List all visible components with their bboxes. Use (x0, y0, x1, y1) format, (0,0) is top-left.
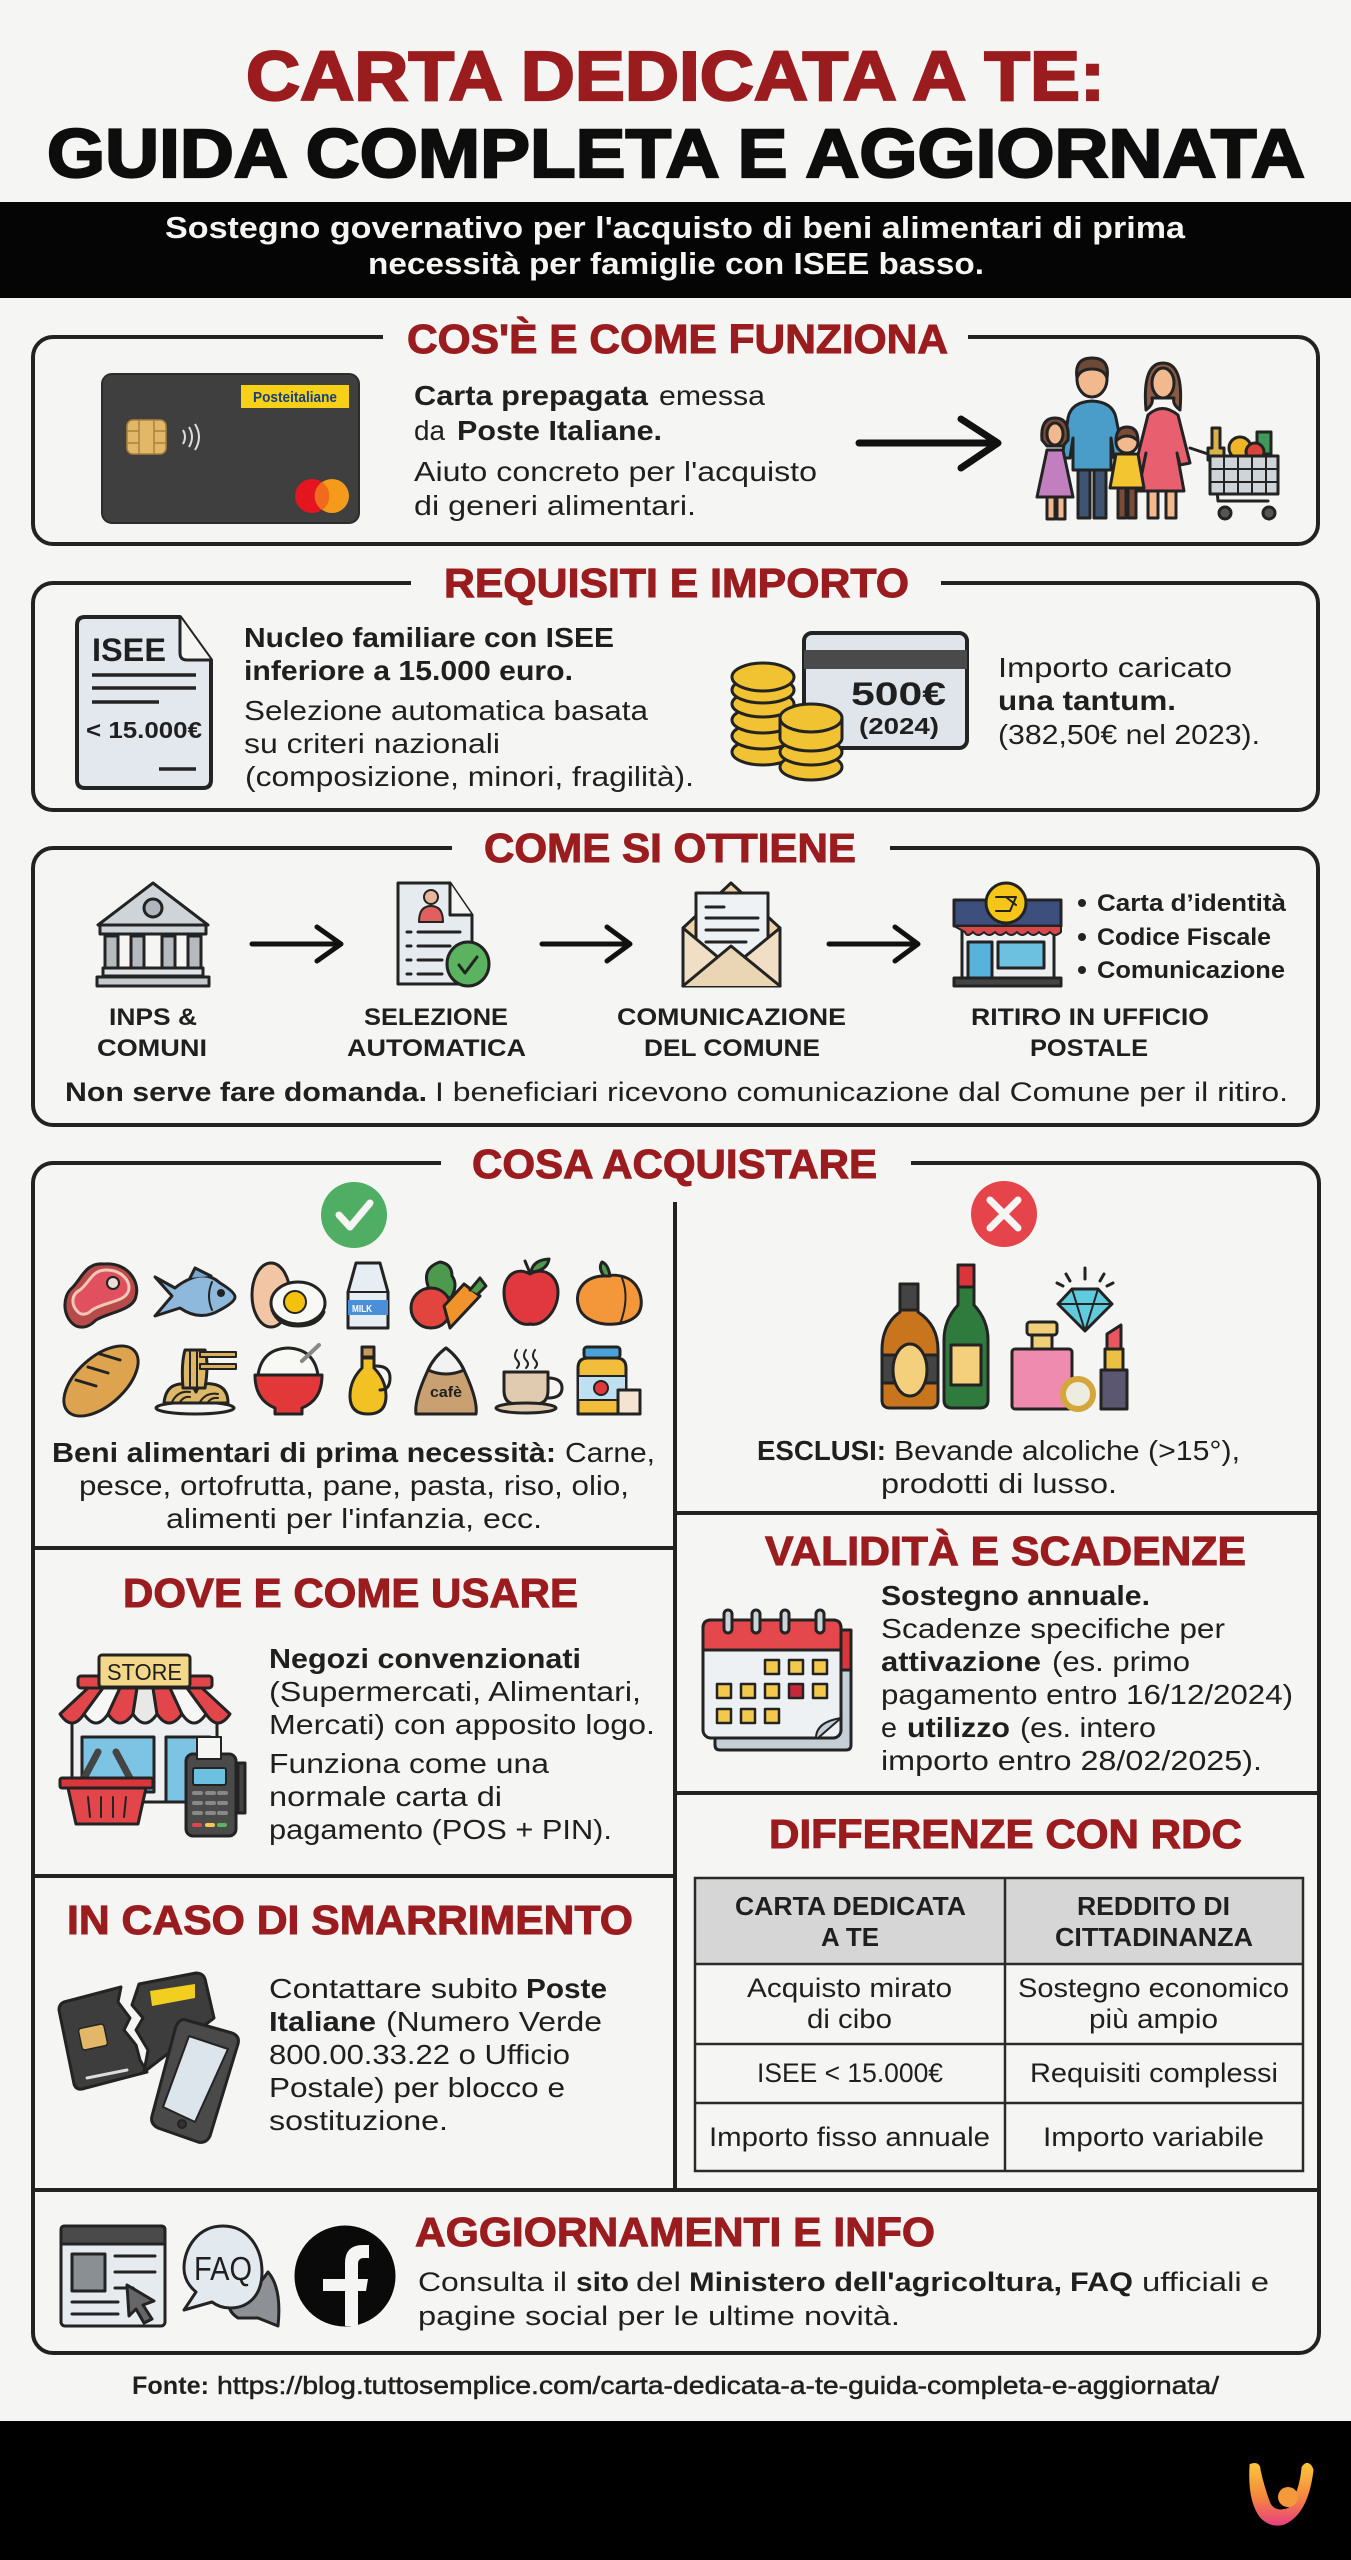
panel: aggiornamenti e info (61, 2209, 1269, 2331)
subtitle band: necessità per famiglie con ISEE basso. (368, 246, 984, 281)
heading: cos'è e come funziona: COS'È E COME FUNZIONA (407, 316, 948, 362)
text: beni alimentari: Beni alimentari di prima necessità: (52, 1437, 556, 1468)
text: beni alimentari: pesce, ortofrutta, pane, pasta, riso, olio, (79, 1470, 629, 1501)
comparison table: ISEE < 15.000€ (757, 2058, 943, 2088)
text: importo una tantum: (382,50€ nel 2023). (998, 719, 1260, 750)
text: sostegno annuale: (es. intero (1020, 1712, 1156, 1743)
panel: come si ottiene (33, 825, 1318, 1125)
text: nucleo familiare: (composizione, minori, fragilità). (245, 761, 694, 792)
text: nucleo familiare: su criteri nazionali (244, 728, 500, 759)
text: consulta: pagine social per le ultime novità. (418, 2301, 900, 2331)
subtitle band: Sostegno governativo per l'acquisto di beni alimentari di prima (165, 210, 1186, 245)
text: contattare poste: (Numero Verde (386, 2006, 602, 2037)
arrow (859, 419, 998, 468)
step labels: SELEZIONE (364, 1004, 508, 1031)
text: consulta: sito (576, 2267, 629, 2297)
icon: green check (321, 1182, 387, 1248)
icon: FAQ bubbles (184, 2226, 279, 2326)
text: carta prepagata: da (414, 415, 445, 446)
text: consulta: ufficiali e (1142, 2267, 1269, 2297)
step labels: INPS & (109, 1004, 197, 1031)
note: no application needed: Non serve fare domanda. (65, 1077, 427, 1107)
text: negozi convenzionati (269, 1643, 655, 1845)
title: GUIDA COMPLETA E AGGIORNATA (47, 115, 1305, 192)
note: no application needed: I beneficiari ricevono comunicazione dal Comune per il ritiro. (435, 1077, 1288, 1107)
panel: differenze con rdc (695, 1811, 1303, 2171)
source line: Fonte: (132, 2372, 209, 2400)
icon: store, basket and POS: STORE (107, 1659, 182, 1685)
arrow (252, 927, 341, 961)
panel: grid frame cosa acquistare (33, 1150, 1319, 2353)
panel: requisiti e importo (33, 560, 1318, 810)
comparison table: CARTA DEDICATA (735, 1891, 966, 1921)
panel: dove e come usare (60, 1570, 655, 1845)
text: esclusi: prodotti di lusso. (881, 1468, 1117, 1499)
text: importo una tantum: Importo caricato (998, 652, 1232, 683)
icon: facebook (294, 2226, 396, 2326)
icon: store, basket and POS (60, 1655, 245, 1836)
icon: automatic selection document (398, 883, 489, 986)
title (47, 37, 1305, 192)
heading: come si ottiene: COME SI OTTIENE (484, 825, 856, 871)
text: negozi convenzionati: normale carta di (269, 1781, 502, 1812)
icon: coins and card 500 euro: (2024) (859, 713, 939, 739)
text: sostegno annuale: (es. primo (1052, 1646, 1190, 1677)
text: esclusi (757, 1435, 1240, 1499)
step labels: POSTALE (1030, 1035, 1148, 1062)
icon: INPS building (97, 883, 209, 986)
heading: dove e come usare: DOVE E COME USARE (123, 1570, 578, 1616)
comparison table: REDDITO DI (1077, 1891, 1230, 1921)
comparison table: Importo fisso annuale (709, 2122, 990, 2152)
text: sostegno annuale: attivazione (881, 1646, 1041, 1677)
icon: calendar (703, 1610, 851, 1750)
text: beni alimentari: Carne, (565, 1437, 655, 1468)
icon: ISEE document: < 15.000€ (86, 717, 202, 743)
text: consulta: FAQ (1070, 2267, 1133, 2297)
text: sostegno annuale: Sostegno annuale. (881, 1580, 1150, 1611)
text: sostegno annuale: importo entro 28/02/2025). (881, 1745, 1262, 1776)
heading: in caso di smarrimento: IN CASO DI SMARRIMENTO (67, 1897, 633, 1943)
text: carta prepagata: Aiuto concreto per l'acquisto (414, 456, 817, 487)
text: carta prepagata: di generi alimentari. (414, 490, 696, 521)
icon: ISEE document (77, 617, 211, 788)
step labels: RITIRO IN UFFICIO (971, 1004, 1209, 1031)
list: documents required: Codice Fiscale (1097, 924, 1271, 951)
text: nucleo familiare: Selezione automatica basata (244, 695, 648, 726)
text: negozi convenzionati: Funziona come una (269, 1748, 549, 1779)
text: sostegno annuale: pagamento entro 16/12/2024) (881, 1679, 1293, 1710)
comparison table: A TE (821, 1922, 879, 1952)
panel: cos'è e come funziona (33, 316, 1318, 544)
step labels: DEL COMUNE (644, 1035, 820, 1062)
icon: family with shopping cart (1037, 358, 1278, 519)
text: sostegno annuale: utilizzo (907, 1712, 1010, 1743)
step labels: COMUNI (97, 1035, 207, 1062)
text: sostegno annuale: e (881, 1712, 897, 1743)
heading: cosa acquistare: COSA ACQUISTARE (472, 1141, 877, 1187)
text: nucleo familiare (244, 622, 694, 792)
list: documents required (1078, 890, 1287, 984)
text: consulta: del (636, 2267, 681, 2297)
arrow (829, 927, 918, 961)
icon: prepaid card: Posteitaliane (253, 389, 337, 406)
text: consulta: Ministero dell'agricoltura, (689, 2267, 1062, 2297)
comparison table: di cibo (807, 2004, 892, 2034)
icon: red cross (971, 1181, 1037, 1247)
text: contattare poste: Contattare subito (269, 1973, 518, 2004)
comparison table: CITTADINANZA (1055, 1922, 1253, 1952)
text: contattare poste: 800.00.33.22 o Ufficio (269, 2039, 570, 2070)
text: sostegno annuale: Scadenze specifiche per (881, 1613, 1225, 1644)
source line: https://blog.tuttosemplice.com/carta-dedicata-a-te-guida-completa-e-aggiornata/ (217, 2372, 1219, 2400)
heading: requisiti e importo: REQUISITI E IMPORTO (444, 560, 909, 606)
logo (1252, 2465, 1311, 2523)
text: contattare poste: Postale) per blocco e (269, 2072, 565, 2103)
step labels: COMUNICAZIONE (617, 1004, 846, 1031)
comparison table: Acquisto mirato (747, 1973, 952, 2003)
panel: in caso di smarrimento (59, 1897, 633, 2142)
step labels: AUTOMATICA (347, 1035, 526, 1062)
text: carta prepagata: emessa (659, 380, 765, 411)
food icons: MILK (352, 1304, 373, 1315)
text: contattare poste: sostituzione. (269, 2105, 448, 2136)
list: documents required: Carta d’identità (1097, 890, 1287, 917)
text: consulta (418, 2267, 1269, 2331)
heading: validità e scadenze: VALIDITÀ E SCADENZE (765, 1528, 1246, 1574)
text: carta prepagata: Poste Italiane. (457, 415, 662, 446)
text: carta prepagata: Carta prepagata (414, 380, 648, 411)
title: CARTA DEDICATA A TE: (246, 37, 1105, 115)
text: negozi convenzionati: Negozi convenzionati (269, 1643, 581, 1674)
text: negozi convenzionati: pagamento (POS + PIN). (269, 1814, 612, 1845)
text: carta prepagata (414, 380, 817, 521)
icon: ISEE document: ISEE (92, 632, 166, 668)
heading: differenze con rdc: DIFFERENZE CON RDC (769, 1811, 1242, 1857)
step labels (97, 1004, 1209, 1062)
icon: envelope (683, 883, 780, 986)
text: contattare poste: Poste (526, 1973, 607, 2004)
text: esclusi: Bevande alcoliche (>15°), (894, 1435, 1240, 1466)
footer black band (0, 2421, 1351, 2560)
text: contattare poste (269, 1973, 607, 2136)
list: documents required: Comunicazione (1097, 957, 1285, 984)
text: sostegno annuale (881, 1580, 1293, 1776)
icon: prepaid card (102, 374, 359, 523)
subtitle band (0, 202, 1351, 298)
heading: aggiornamenti e info: AGGIORNAMENTI E INFO (415, 2209, 935, 2255)
text: contattare poste: Italiane (269, 2006, 376, 2037)
comparison table: Sostegno economico (1018, 1973, 1289, 2003)
text: consulta: Consulta il (418, 2267, 567, 2297)
icon: broken card and phone (59, 1973, 238, 2142)
text: importo una tantum: una tantum. (998, 685, 1176, 716)
icon: coins and card 500 euro (732, 633, 967, 780)
text: negozi convenzionati: (Supermercati, Alimentari, (269, 1676, 641, 1707)
text: beni alimentari (52, 1437, 655, 1534)
food icons: cafè (430, 1384, 462, 1401)
arrow (542, 927, 630, 961)
icon: coins and card 500 euro: 500€ (851, 676, 946, 712)
panel: validità e scadenze (703, 1528, 1293, 1776)
note: no application needed (65, 1077, 1288, 1107)
food icons (51, 1259, 641, 1429)
comparison table: Importo variabile (1043, 2122, 1264, 2152)
icon: website (61, 2226, 165, 2326)
comparison table: Requisiti complessi (1030, 2058, 1278, 2088)
text: importo una tantum (998, 652, 1260, 750)
text: nucleo familiare: Nucleo familiare con ISEE (244, 622, 614, 653)
text: beni alimentari: alimenti per l'infanzia, ecc. (166, 1503, 542, 1534)
text: esclusi: ESCLUSI: (757, 1435, 886, 1466)
icon: post office (954, 883, 1061, 986)
text: nucleo familiare: inferiore a 15.000 euro. (244, 655, 573, 686)
icon: FAQ bubbles: FAQ (194, 2250, 252, 2287)
comparison table (695, 1878, 1303, 2171)
icons: excluded alcohol and luxury items (882, 1265, 1127, 1409)
comparison table: più ampio (1089, 2004, 1218, 2034)
text: negozi convenzionati: Mercati) con apposito logo. (269, 1709, 655, 1740)
